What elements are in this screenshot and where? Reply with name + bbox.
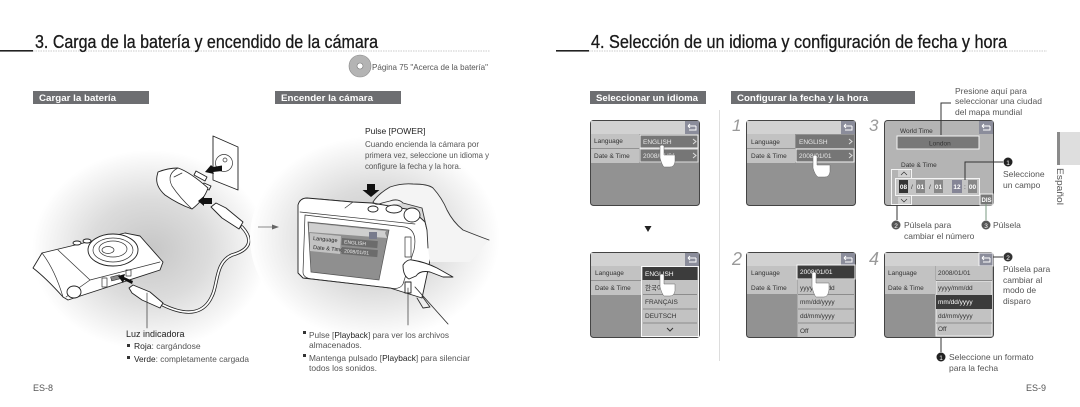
callout: back to shooting mode: [993, 252, 1051, 306]
text: Playback instructions: almacenados.: [309, 340, 362, 350]
screen: date step 3: 00: [969, 184, 976, 191]
screen: select language A: Language: [594, 138, 623, 145]
screen: date step 2: dd/mm/yyyy: [800, 313, 835, 320]
section bar: Encender la cámara: Encender la cámara: [281, 93, 374, 104]
screen: date step 1: Date & Time: [751, 153, 787, 160]
icon: tapping hand: [660, 274, 675, 296]
screen: select language B: Language: [595, 270, 624, 277]
screen: select language B: [590, 252, 700, 338]
screen: date step 2: 2008/01/01: [800, 269, 833, 276]
screen: date step 3: 12: [953, 184, 961, 191]
text: Luz indicadora: Verde: completamente cargada: [134, 354, 249, 364]
camera screen: Language: [313, 236, 338, 244]
text: Luz indicadora: [126, 329, 249, 364]
screen: date step 3: DIS: [981, 198, 992, 204]
text: Playback instructions: [303, 330, 470, 373]
callout: select a field: [965, 158, 1045, 190]
camera back body: [298, 198, 432, 298]
arrow: next step down: [644, 226, 652, 232]
camera screen: [308, 222, 389, 280]
screen: date step 4: [884, 252, 994, 338]
text: Luz indicadora: Luz indicadora: [126, 329, 185, 339]
page number ES-8: ES-8: [33, 383, 53, 393]
arrow: charge to power on: [258, 224, 279, 230]
icon: tapping hand: [813, 155, 830, 177]
screen: date step 4: dd/mm/yyyy: [938, 313, 973, 320]
callout: back to shooting mode: Púlsela para: [1003, 264, 1051, 274]
callout: back to shooting mode: 2: [1006, 255, 1010, 262]
screen: date step 4: Off: [938, 326, 947, 333]
divider: [719, 110, 720, 361]
section bar: Configurar la fecha y la hora: Configurar la fecha y la hora: [737, 93, 869, 104]
power arrow: [362, 184, 380, 197]
screen: date step 2: mm/dd/yyyy: [800, 299, 835, 306]
icon: tapping hand: [812, 272, 829, 297]
callout: back to shooting mode: modo de: [1003, 285, 1036, 295]
callout: tap: 3: [984, 223, 988, 230]
text: Pulse POWER: [365, 126, 490, 171]
section bar: Seleccionar un idioma: Seleccionar un idioma: [596, 93, 699, 104]
screen: date step 4: 2008/01/01: [938, 270, 971, 277]
callout: select a field: un campo: [1003, 180, 1041, 190]
screen: date step 1: 2008/01/01: [799, 153, 832, 160]
screen: select language A: ENGLISH: [643, 139, 672, 146]
callout: select date format: Seleccione un formato: [949, 352, 1034, 362]
text: Playback instructions: Mantenga pulsado [Playback] para silenciar: [309, 353, 470, 363]
text: Pulse POWER: primera vez, seleccione un idioma y: [365, 150, 490, 160]
text: Luz indicadora: Roja: cargándose: [134, 341, 201, 351]
screen: select language B: FRANÇAIS: [645, 299, 679, 306]
charger adapter: [157, 165, 222, 209]
screen: date step 3: 01: [935, 184, 942, 191]
screen: select language A: [590, 120, 700, 206]
callout: tap to change the number: 2: [894, 223, 898, 230]
illustration: charging camera: [32, 136, 268, 350]
side tab: Español: [1055, 132, 1080, 205]
callout: tap to change the number: Púlsela para: [904, 220, 952, 230]
callout: select a field: Seleccione: [1003, 169, 1045, 179]
callout: tap to change the number: cambiar el número: [904, 231, 975, 241]
step number 1: 1: [732, 116, 741, 135]
page number ES-9: ES-9: [1026, 383, 1046, 393]
callout: select a field: 1: [1006, 160, 1010, 167]
callout: select date format: [936, 338, 1034, 373]
screen: date step 1: [746, 120, 856, 206]
USB cable: [129, 203, 249, 328]
screen: date step 2: [746, 252, 856, 338]
text: Pulse POWER: configure la fecha y la hora.: [365, 161, 461, 171]
camera screen: ENGLISH: [344, 240, 367, 247]
screen: date step 3: Date & Time: [901, 162, 937, 169]
callout: tap: [982, 204, 1021, 230]
icon: tapping hand: [660, 145, 675, 167]
screen: date step 3: World Time: [900, 128, 933, 135]
wall socket: [213, 136, 238, 190]
callout: world map city: seleccionar una ciudad: [955, 96, 1042, 106]
heading: section 3: 3. Carga de la batería y encendido de la cámara: [35, 32, 379, 52]
step number 3: 3: [869, 116, 879, 135]
screen: date step 4: yyyy/mm/dd: [938, 285, 973, 292]
screen: date step 4: Language: [888, 270, 917, 277]
screen: date step 1: ENGLISH: [799, 139, 828, 146]
camera screen: Date & Time: [313, 245, 343, 254]
screen: date step 3: 08: [900, 184, 907, 191]
illustration: camera back with hand: [250, 136, 500, 340]
screen: date step 3: /: [911, 184, 913, 191]
screen: date step 3: :: [964, 184, 966, 191]
heading: section 4: 4. Selección de un idioma y configuración de fecha y hora: [591, 32, 1008, 52]
screen: date step 3: [884, 120, 994, 206]
callout: world map city: Presione aquí para: [955, 86, 1027, 96]
callout: world map city: [941, 86, 1042, 135]
page reference with disc icon: Página 75 "Acerca de la batería": [372, 62, 488, 72]
section bar: Encender la cámara: [275, 91, 401, 104]
text: Pulse POWER: Pulse [POWER]: [365, 126, 425, 136]
text: Pulse POWER: Cuando encienda la cámara por: [365, 139, 479, 149]
screen: select language B: ENGLISH: [645, 271, 674, 278]
page reference with disc icon: [349, 55, 488, 77]
step number 4: 4: [869, 249, 879, 269]
callout: back to shooting mode: cambiar al: [1003, 275, 1042, 285]
text: Playback instructions: Pulse [Playback] para ver los archivos: [309, 330, 449, 340]
screen: select language B: 한국어: [645, 283, 663, 292]
screen: date step 3: 01: [917, 184, 924, 191]
section bar: Cargar la batería: [33, 91, 149, 104]
camera screen: 2008/01/01: [344, 249, 369, 257]
screen: select language A: Date & Time: [594, 153, 630, 160]
side tab: Español: Español: [1055, 168, 1065, 205]
screen: select language A: 2008/01/01: [643, 153, 676, 160]
screen: date step 2: Date & Time: [751, 285, 787, 292]
screen: date step 3: /: [929, 184, 931, 191]
callout: select date format: 1: [939, 355, 943, 362]
screen: date step 3: London: [929, 140, 951, 148]
callout: tap to change the number: [892, 205, 975, 241]
section bar: Configurar la fecha y la hora: [731, 91, 915, 104]
section bar: Cargar la batería: Cargar la batería: [39, 93, 117, 104]
callout: select date format: para la fecha: [949, 363, 998, 373]
screen: select language B: Date & Time: [595, 285, 631, 292]
text: Playback instructions: todos los sonidos.: [309, 363, 377, 373]
hand outline: [373, 184, 489, 324]
screen: date step 4: Date & Time: [888, 285, 924, 292]
camera body: [33, 233, 163, 300]
screen: date step 2: Off: [800, 328, 809, 335]
screen: date step 2: Language: [751, 270, 780, 277]
callout: world map city: del mapa mundial: [955, 107, 1022, 117]
callout: tap: Púlsela: [993, 220, 1021, 230]
screen: date step 2: yyyy/mm/dd: [800, 285, 835, 292]
screen: date step 4: mm/dd/yyyy: [938, 299, 973, 306]
screen: select language B: DEUTSCH: [645, 313, 677, 320]
callout: back to shooting mode: disparo: [1003, 296, 1031, 306]
screen: date step 1: Language: [751, 139, 780, 146]
step number 2: 2: [731, 249, 742, 269]
